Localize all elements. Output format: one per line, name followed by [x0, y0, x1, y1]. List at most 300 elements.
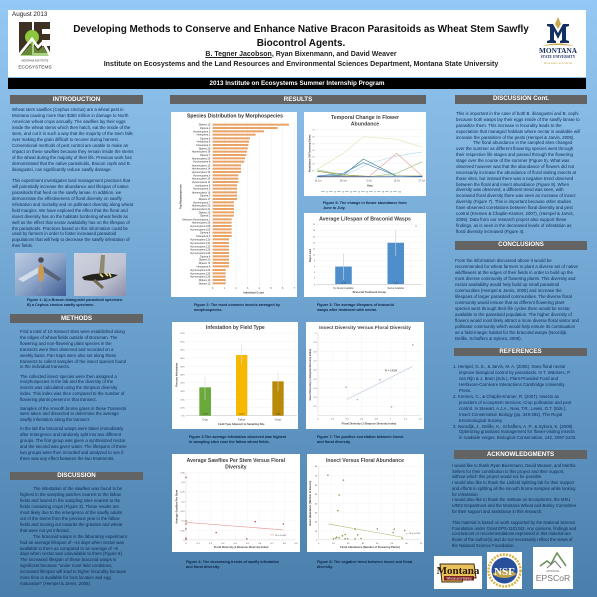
text: methods one: weekly basis. Pan traps were also set along these — [20, 353, 116, 358]
bar chart: infestation by field type: 35% — [180, 366, 185, 368]
text: methods two: flowering plants present in that transect. — [20, 397, 97, 402]
scatter chart: insect versus floral abundance: 80 — [315, 466, 318, 468]
bar chart: species distribution: Unknown Hymenoptera 1 — [182, 218, 211, 221]
text: references: Herbivore-Carnivore Interactions Cambridge University — [459, 382, 564, 387]
bar chart: species distribution: Hymenoptera 14 — [192, 168, 211, 171]
heading: conclusions — [455, 241, 587, 250]
bar chart: infestation by field type: Infestation by Field Type — [206, 325, 265, 331]
line chart: temporal change in flower abundance: T4 — [350, 192, 353, 194]
text: conclusions: communities (Hempel & Jarvis, 2005) and increase the — [455, 288, 562, 293]
bar chart: species distribution: Hymenoptera 21 — [192, 208, 211, 211]
caption: figure 8: diversity. — [317, 564, 333, 568]
scatter chart: average sawflies per stem versus floral diversity: 0 — [183, 540, 185, 542]
caption: figure 3: wasps after treatment with nectar. — [317, 308, 377, 312]
scatter chart: average sawflies per stem versus floral diversity: 0.9 — [295, 543, 298, 545]
text: discussion: available to them as compared to an average of ~5 — [20, 546, 118, 551]
header panel — [8, 10, 586, 77]
text: introduction: inside the wheat stems which then hatch, eat the inside of the — [12, 125, 130, 130]
caption: figure 2: morphospecies. — [194, 308, 223, 312]
text: acknowledgments: I would also like to thank the Linfield Splitting lab for their support — [452, 480, 574, 485]
bar chart: infestation by field type: Crop — [202, 419, 208, 422]
caption: figure 8: Figure 8: The negative trend between insect and floral — [317, 560, 412, 564]
text: discussion continued: have observed correlations between floral diversity and pest — [456, 205, 573, 210]
scatter chart: insect versus floral abundance: 0 — [316, 540, 318, 542]
scatter chart: insect diversity versus floral diversity: 0.6 — [314, 370, 317, 372]
bar chart: species distribution: 7 — [294, 288, 296, 290]
text: discussion: increased lifespan will lead to higher fecundity because — [20, 569, 126, 574]
line chart: temporal change in flower abundance: 10 — [312, 170, 315, 172]
icon: Montana wheat and barley logo — [434, 556, 482, 589]
text: introduction paragraph two: will potentially increase the abundance and lifespan of native — [12, 184, 129, 189]
text: discussion continued: their respective life stages and passed through the flowering — [456, 152, 573, 157]
heading: discussion — [10, 472, 143, 480]
bar chart: infestation by field type: 5% — [182, 416, 185, 418]
text: discussion continued: diversity was observed, a different trend was seen, with — [456, 187, 564, 192]
text: conclusions: community would ensure that as different flowering plant — [455, 300, 564, 305]
heading: references: REFERENCES — [499, 348, 542, 355]
text: discussion: significant because "under most field conditions, — [20, 563, 113, 568]
text: introduction: ibiangustei, can significantly reduce sawfly damage. — [12, 167, 112, 172]
title — [73, 24, 529, 49]
text: introduction — [12, 107, 134, 172]
text: funding statement: This material is based on work supported by the National Science — [452, 520, 575, 525]
text: discussion continued: increase the parasitism of the pests (Hempel & Jarvis, 2005). — [456, 134, 575, 140]
text: funding statement — [452, 520, 576, 548]
scatter chart: average sawflies per stem versus floral diversity: 0.5 — [246, 543, 250, 545]
scatter chart: insect diversity versus floral diversity: 0.4 — [346, 419, 349, 421]
text: introduction: American wheat crops annually. The sawflies lay their eggs — [12, 119, 126, 124]
scatter chart: average sawflies per stem versus floral diversity: 0.7 — [271, 543, 274, 545]
caption: figure 3 infestation — [189, 434, 286, 444]
bar chart: infestation by field type: Fallow — [238, 419, 245, 422]
scatter chart: average sawflies per stem versus floral diversity: 0.2 — [182, 501, 185, 503]
text: discussion: fields and lowest in the sampling sites nearest to the — [20, 498, 120, 503]
bar chart: species distribution: Diptera 74 — [199, 262, 211, 265]
bar chart: infestation by field type: n=115 — [239, 413, 245, 415]
line chart: temporal change in flower abundance: Temporal Change in Flower — [331, 115, 399, 121]
line chart: temporal change in flower abundance: Date — [367, 183, 373, 187]
bar chart: species distribution: Diptera 4 — [200, 255, 211, 258]
line chart: temporal change in flower abundance: 28-Jun — [340, 181, 348, 183]
text: references: providers of ecosystem services: Crop pollination and pest — [459, 400, 571, 405]
bar chart: species distribution: Hymenoptera 126 — [190, 276, 211, 279]
icon: Montana State University logo: STATE UNIVERSITY — [541, 55, 576, 59]
caption: figure 1: B) a Cephus cinctus sawfly specimen. — [27, 302, 94, 306]
line chart: temporal change in flower abundance: T2 — [334, 192, 337, 194]
bar chart: species distribution: Diptera 12 — [199, 282, 211, 285]
text: discussion continued: necessarily increase the abundance of floral visiting insects at — [456, 170, 576, 175]
bar chart: species distribution: Hymenoptera 16 — [192, 191, 211, 194]
bar chart: species distribution: Hymenoptera 132 — [190, 245, 211, 248]
bar chart: infestation by field type: 55% — [180, 333, 185, 335]
line chart: temporal change in flower abundance: Abundance — [351, 121, 379, 127]
bar chart: average lifespan of braconid wasps: n=22 — [394, 282, 398, 284]
bar chart: species distribution: Hymenoptera 128 — [190, 249, 211, 252]
icon: Montana State University logo: MONTANA — [539, 46, 578, 55]
bar chart: average lifespan of braconid wasps: Nectar Available — [387, 287, 405, 290]
bar chart: species distribution: 0 — [212, 288, 214, 290]
text: references — [453, 364, 576, 440]
caption: figure 3 infestation: in sampling sites near the fallow wheat fields. — [189, 440, 270, 444]
bar chart: species distribution: Hymenoptera 33 — [192, 171, 211, 174]
bar chart: average lifespan of braconid wasps: 16 — [313, 236, 316, 238]
bar chart: species distribution: Hymenoptera 108 — [190, 225, 211, 228]
text: references: 3. Noordijk, J., Delille, K., Schaffers, A. P., & Sykora, K. (2009). — [453, 424, 574, 429]
text: conclusions: nectar availability would help build up small parasitoid — [455, 282, 559, 287]
line chart: temporal change in flower abundance: 15-Jun — [314, 181, 322, 183]
scatter chart: insect versus floral abundance: 50 — [315, 494, 318, 496]
bar chart: average lifespan of braconid wasps: 20 — [313, 224, 316, 226]
icon: EPSCoR logo: EPSCoR — [536, 573, 570, 583]
bar chart: species distribution: 4 — [259, 288, 261, 290]
text: methods two: insects was calculated using the Simpson diversity — [20, 385, 117, 390]
scatter chart: insect versus floral abundance: 40 — [315, 503, 318, 505]
bar chart: infestation by field type: 45% — [180, 350, 185, 352]
bar chart: species distribution: Diptera 26 — [199, 147, 211, 150]
caption: figure 2 — [194, 302, 280, 312]
bar chart: species distribution: Hemiptera 8 — [197, 265, 211, 268]
text: conclusions: available to the parasitoid population. The higher diversity of — [455, 312, 572, 317]
scatter chart: insect versus floral abundance: 70 — [420, 543, 423, 545]
scatter chart: average sawflies per stem versus floral diversity: 0.3 — [182, 482, 185, 484]
scatter chart: insect diversity versus floral diversity: Floral Diversity (1-Simpson Diversity Index) — [342, 422, 396, 426]
bar chart: species distribution: Hymenoptera 2 — [193, 130, 211, 133]
line chart: temporal change in flower abundance: T3 — [342, 192, 345, 194]
program banner — [8, 78, 586, 89]
text: methods one: flowering and non-flowering plant species in the — [20, 341, 112, 346]
text: methods three: were taken and dissected to determine the average — [20, 411, 119, 416]
text: methods one: transects to collect samples of the insect species found — [20, 359, 126, 364]
caption: figure 3 infestation: Figure 3:The average infestation observed was highest — [189, 434, 286, 438]
bar chart: species distribution: Hymenoptera 129 — [190, 252, 211, 255]
line chart: temporal change in flower abundance: 50 — [312, 143, 315, 145]
text: introduction paragraph two: parasitoids that feed on the sawfly larvae. In addition, we — [12, 190, 121, 195]
bar chart: infestation by field type: n=81 — [276, 413, 281, 415]
scatter chart: average sawflies per stem versus floral diversity: 0.1 — [182, 521, 185, 523]
text: funding statement: Foundation under Grant EPS-1101342. Any opinions, findings and — [452, 526, 576, 531]
text: introduction: over making the grain difficult to recover during harvest. — [12, 137, 119, 142]
bar chart: species distribution: Diptera 23 — [199, 259, 211, 262]
text: introduction: Montana causing more than $350 million in damage to North — [12, 113, 128, 118]
line chart: temporal change in flower abundance: 40 — [312, 150, 315, 152]
bar chart: infestation by field type: 40% — [180, 358, 185, 360]
text: discussion: maturation" (Hempel & Jarvis, 2005). — [20, 581, 91, 586]
bar chart: species distribution: Hemiptera 1 — [197, 134, 211, 137]
bar chart: species distribution: Hymenoptera 13 — [192, 164, 211, 167]
caption: figure 7: and floral diversity. — [317, 440, 351, 444]
heading: introduction: INTRODUCTION — [53, 96, 100, 103]
scatter chart: insect versus floral abundance — [307, 454, 424, 552]
text: discussion: The increased lifespan of these braconid wasps is — [20, 557, 116, 562]
scatter chart: insect diversity versus floral diversity: 1.2 — [404, 419, 408, 421]
text: acknowledgments — [452, 463, 576, 514]
bar chart: infestation by field type: 20% — [180, 391, 185, 393]
text: methods two: morphospecies in the lab and the diversity of the — [20, 379, 113, 384]
caption: figure 3 — [317, 302, 394, 312]
bar chart: species distribution: 5 — [270, 288, 272, 290]
authors: B. Tegner Jacobson, Ryan Bixenmann, and David Weaver — [205, 51, 397, 58]
text: introduction: stem, and cut it in such a way that the majority of the stem falls — [12, 131, 133, 136]
text: discussion continued: those sites, but instead there was a negative trend observed — [456, 176, 573, 181]
program banner: 2013 Institute on Ecosystems Summer Internship Program — [210, 80, 384, 87]
scatter chart: insect versus floral abundance: 30 — [315, 513, 318, 515]
line chart: temporal change in flower abundance — [304, 112, 426, 196]
text: introduction: of the wheat during the majority of their life. Previous work has — [12, 155, 132, 160]
text: conclusions: recommended for wheat farmers to plant a diverse set of native — [455, 264, 578, 269]
line chart: temporal change in flower abundance: 30 — [312, 157, 315, 159]
bar chart: species distribution: Diptera 17 — [199, 198, 211, 201]
text: discussion continued: stage over the course of the summer (Figure 5). What was — [456, 158, 569, 163]
scatter chart: insect diversity versus floral diversity — [306, 322, 424, 429]
icon: EPSCoR logo — [533, 547, 573, 589]
bar chart: species distribution: Lepidoptera 5 — [195, 184, 211, 187]
text: funding statement: conclusions or recommendations expressed in this material are — [452, 531, 571, 536]
text: introduction: Wheat stem sawflies (Cephus cinctus) are a wheat pest in — [12, 107, 124, 112]
bar chart: species distribution: 6 — [282, 288, 284, 290]
bar chart: average lifespan of braconid wasps: Days Lived — [309, 249, 312, 262]
bar chart: species distribution: Hymenoptera 29 — [192, 157, 211, 160]
photo: Bracon specimen — [15, 253, 66, 296]
bar chart: infestation by field type: 30% — [180, 375, 185, 377]
bar chart: species distribution: Coleoptera 6 — [196, 235, 211, 238]
caption: figure 1: Figure 1: A) a Bracon ibiangustei parasitoid specimen. — [27, 298, 123, 302]
line chart: temporal change in flower abundance: 5-Jul — [366, 181, 372, 183]
text: methods four: there was any effect between the two treatments. — [20, 456, 115, 461]
heading: methods — [10, 314, 143, 323]
bar chart: species distribution: Hymenoptera 24 — [192, 178, 211, 181]
scatter chart: insect versus floral abundance: 10 — [332, 543, 336, 545]
bar chart: species distribution: Hymenoptera 5 — [193, 188, 211, 191]
bar chart: average lifespan of braconid wasps: 0 — [314, 284, 316, 286]
caption: figure 7: Figure 7: The positive correlation between insect — [317, 434, 403, 438]
bar chart: species distribution: 1 — [224, 288, 226, 290]
text: discussion: highest in the sampling patches nearest to the fallow — [20, 492, 121, 497]
bar chart: species distribution: Hymenoptera 120 — [190, 269, 211, 272]
text: discussion: out of the stems from the previous year in the fallow — [20, 516, 119, 521]
date label: August 2013 — [12, 11, 47, 18]
line chart: temporal change in flower abundance: 20 — [312, 164, 315, 166]
scatter chart: average sawflies per stem versus floral diversity — [172, 454, 300, 552]
text: introduction paragraph two: insect diversity has on the habitats bordering wheat fields as — [12, 214, 128, 219]
text: methods four: groups. The first group was given a synthesized nectar — [20, 438, 125, 443]
scatter chart: average sawflies per stem versus floral diversity: 0.4 — [234, 543, 237, 545]
line chart: temporal change in flower abundance: 60 — [312, 136, 315, 138]
text: methods two — [20, 374, 124, 402]
text: methods one: Find a total of 10 transect sites were established along — [20, 329, 125, 334]
bar chart: infestation by field type: 10% — [180, 408, 185, 410]
text: methods three — [20, 406, 126, 422]
text: methods one: transects were then observed and recorded on a — [20, 347, 113, 352]
caption: figure 4: Figure 4: The decreasing trends of sawfly infestation — [186, 560, 279, 564]
text: discussion continued: over the summer as different flowering species went through — [456, 146, 573, 151]
bar chart: infestation by field type: 25% — [180, 383, 185, 385]
line chart: temporal change in flower abundance: T10 — [398, 192, 402, 194]
text: conclusions: Delille, Schaffers & Sykora, 2009). — [455, 336, 522, 341]
text: discussion: The infestation of the sawflies was found to be — [33, 486, 122, 491]
scatter chart: insect diversity versus floral diversity: 0.9 — [314, 342, 317, 344]
text: acknowledgments: and efforts in splitting all the smooth brome samples while looking — [452, 486, 575, 491]
text: acknowledgments: I would like to thank Ryan Bixenmann, David Weaver, and Martha — [452, 463, 575, 468]
icon: Montana wheat and barley logo: Montana — [437, 565, 480, 577]
scatter chart: average sawflies per stem versus floral diversity: 0.2 — [209, 543, 213, 545]
text: references: in roadside verges. Biological Conservation, 142, 2097-2103. — [459, 435, 576, 440]
bar chart: average lifespan of braconid wasps: n — [415, 224, 417, 228]
text: discussion: days when nectar was unavailable to them (Figure 6). — [20, 551, 123, 556]
scatter chart: average sawflies per stem versus floral diversity: 0.35 — [180, 472, 185, 474]
bar chart: species distribution: Hemiptera 6 — [197, 141, 211, 144]
text: references: Optimizing grassland management for flower-visiting insects — [459, 429, 575, 434]
bar chart: species distribution: Diptera 6 — [200, 137, 211, 140]
bar chart: species distribution: Hymenoptera 26 — [192, 222, 211, 225]
text: conclusions: as a field-margin habitat for the braconid wasps (Noordijk, — [455, 330, 567, 335]
text: conclusions: most diverse community of flowering plants. This diversity and — [455, 276, 575, 281]
affiliation: Institute on Ecosystems and the Land Resources and Environmental Sciences Department, Montana State University — [104, 60, 498, 68]
scatter chart: insect versus floral abundance: 60 — [405, 543, 408, 545]
scatter chart: insect diversity versus floral diversity: 1.4 — [419, 419, 422, 421]
text: references: Insect Conservation Biology (pp. 349-382). The Royal — [459, 412, 562, 417]
text: acknowledgments: I would also like to thank the Institute on Ecosystems, the MSU — [452, 497, 570, 502]
bar chart: average lifespan of braconid wasps: 4 — [314, 272, 316, 274]
text: acknowledgments: for infestation. — [452, 492, 479, 497]
text: introduction: Conventional methods of pest control are unable to make an — [12, 143, 128, 148]
bar chart: average lifespan of braconid wasps: No Nectar Available — [333, 287, 354, 290]
text: references: control. In Stewart, A.J.A., New, T.R., Lewis, O.T. (Eds.), — [459, 406, 567, 411]
text: conclusions: From the information discussed above it would be — [455, 258, 552, 263]
scatter chart: insect diversity versus floral diversity: 0.4 — [314, 388, 317, 390]
bar chart: species distribution: Species Distribution by Morphospecies — [187, 114, 283, 120]
bar chart: species distribution — [171, 112, 297, 297]
icon: Montana wheat and barley logo: Wheat and Barley — [446, 577, 472, 581]
text: acknowledgments: LRES Department and the Montana Wheat and Barley Committee — [452, 503, 576, 508]
scatter chart: average sawflies per stem versus floral diversity: 0.3 — [221, 543, 225, 545]
bar chart: species distribution: Hymenoptera 130 — [190, 238, 211, 241]
bar chart: species distribution: Diptera 8 — [200, 232, 211, 235]
bar chart: infestation by field type — [172, 322, 298, 429]
scatter chart: average sawflies per stem versus floral diversity: Average Sawflies Per Stem Versus Floral — [187, 458, 286, 464]
text: methods three: sawfly infestation along the transect. — [20, 417, 90, 422]
line chart: temporal change in flower abundance: T9 — [390, 192, 393, 194]
bar chart: species distribution: Hymenoptera 9 — [193, 174, 211, 177]
title: Developing Methods to Conserve and Enhance Native Bracon Parasitoids as Wheat Stem Sawfly — [73, 24, 529, 35]
text: discussion continued: control (Kremen & Chaplin-Kramer, 2007), (Hempel & Jarvis, — [456, 211, 574, 216]
text: discussion continued: observed however was that the abundance of flowers did not — [456, 164, 574, 169]
text: introduction paragraph two: This experiment investigates land management practices that — [12, 178, 130, 183]
text: conclusions: lifespans of larger parasitoid communities. The diverse floral — [455, 294, 572, 299]
text: methods four: In the lab the braconid wasps were taken immediately — [20, 426, 123, 431]
caption: figure 1 — [27, 298, 123, 307]
bar chart: average lifespan of braconid wasps: 14 — [313, 242, 316, 244]
heading: results: RESULTS — [284, 96, 312, 103]
scatter chart: insect versus floral abundance: 40 — [376, 543, 379, 545]
text: acknowledgments: without which this project would not be possible. — [452, 474, 542, 479]
photo: Cephus cinctus specimen — [74, 253, 126, 296]
text: discussion continued: findings, as is seen in the decreased levels of infestation as — [456, 223, 571, 228]
scatter chart: insect versus floral abundance: Floral Abundance (Number of Flowering Plants) — [340, 545, 400, 549]
bar chart: infestation by field type: 50% — [180, 341, 185, 343]
text: discussion continued: This is important in the case of both B. ibiangustei and B. cephi — [456, 111, 579, 116]
line chart: temporal change in flower abundance: T7 — [374, 192, 377, 194]
scatter chart: insect versus floral abundance: Insect Abundance (Number of Insects) — [309, 481, 312, 526]
bar chart: infestation by field type: 15% — [180, 399, 185, 401]
bar chart: species distribution: Hymenoptera 105 — [190, 228, 211, 231]
bar chart: species distribution: 2 — [235, 288, 237, 290]
text: discussion: The braconid wasps in the laboratory experiment — [33, 534, 127, 539]
scatter chart: insect versus floral abundance: R² = 0.0505 — [409, 532, 421, 535]
text: discussion: had an average lifespan of ~14 days when nectar was — [20, 540, 124, 545]
scatter chart: insect diversity versus floral diversity: 0.6 — [360, 419, 364, 421]
bar chart: species distribution: Hymenoptera 38 — [192, 151, 211, 154]
bar chart: infestation by field type: Percent Infestation — [174, 362, 178, 387]
text: references: 2. Kremen, C., & Chaplin-Kramer, R. (2007). Insects as — [453, 394, 559, 399]
text: conclusions: flowers would most likely attract a more diverse floral visitor and — [455, 318, 579, 323]
heading: discussion continued — [455, 95, 587, 104]
bar chart: average lifespan of braconid wasps: n=19 — [341, 282, 346, 284]
scatter chart: average sawflies per stem versus floral diversity: 0.05 — [180, 530, 185, 532]
icon: NSF logo — [487, 552, 522, 589]
bar chart: average lifespan of braconid wasps: Braconid Treatment Group — [353, 290, 386, 294]
scatter chart: insect diversity versus floral diversity: Insect Diversity (1-Simpson Diversity Index) — [309, 349, 312, 400]
caption: figure 8 — [317, 560, 412, 569]
bar chart: infestation by field type: Grass — [275, 419, 282, 422]
text: discussion: most likely due to the emergence of the sawfly adults — [20, 510, 122, 515]
icon: Montana State University logo: Mountains and Minds — [544, 61, 573, 65]
bar chart: species distribution: Coleoptera 3 — [196, 144, 211, 147]
text: discussion continued: The floral abundance in the sampled sites changed — [473, 140, 572, 145]
heading: discussion continued: DISCUSSION Cont. — [493, 95, 549, 102]
line chart: temporal change in flower abundance: 70 — [312, 130, 315, 132]
text: acknowledgments: Sellers for their contribution to this project and their support, — [452, 469, 564, 474]
scatter chart: average sawflies per stem versus floral diversity: 0.1 — [197, 543, 201, 545]
scatter chart: insect diversity versus floral diversity: 0.2 — [331, 419, 335, 421]
text: introduction paragraph two: infestation and mortality and on pollinator diversity along wheat — [12, 202, 133, 207]
scatter chart: insect diversity versus floral diversity: 0.2 — [314, 406, 317, 408]
scatter chart: average sawflies per stem versus floral diversity: Diversity — [225, 464, 247, 470]
bar chart: species distribution: Diptera 7 — [200, 154, 211, 157]
bar chart: species distribution: Diptera 15 — [199, 124, 211, 127]
text: references: improve biological control by parasitoids. In T. Wäckers, P. — [459, 370, 571, 375]
icon: NSF logo: NSF — [494, 566, 515, 578]
scatter chart: insect diversity versus floral diversity: 1 — [315, 333, 317, 335]
bar chart: species distribution: Diptera 3 — [200, 195, 211, 198]
heading: discussion: DISCUSSION — [57, 472, 96, 479]
scatter chart: average sawflies per stem versus floral diversity: R² = 0.0149 — [275, 534, 287, 537]
bar chart: species distribution: 3 — [247, 288, 249, 290]
icon: Institute on Ecosystems logo — [18, 22, 52, 70]
bar chart: species distribution: Hymenoptera 20 — [192, 205, 211, 208]
caption: figure 5: June to July. — [323, 206, 345, 210]
bar chart: species distribution: Hymenoptera 7 — [193, 201, 211, 204]
scatter chart: average sawflies per stem versus floral diversity: 0.8 — [283, 543, 287, 545]
text: conclusions: wildflowers at the edges of their fields in order to build up the — [455, 270, 573, 275]
icon: Institute on Ecosystems logo: MONTANA INSTITUTE — [22, 58, 49, 62]
line chart: temporal change in flower abundance: T8 — [382, 192, 385, 194]
heading: references — [454, 348, 587, 356]
scatter chart: insect diversity versus floral diversity: 0.3 — [314, 397, 317, 399]
text: acknowledgments: for their support and assistance in this research. — [452, 509, 542, 514]
text: introduction paragraph two: well as the effect that nectar availability has on the lifespan of — [12, 220, 130, 225]
text: methods one: the edges of wheat fields outside of Bozeman. The — [20, 335, 117, 340]
text: introduction: impact on these sawflies because they remain inside the stems — [12, 149, 133, 154]
icon: EPSCoR logo: MONTANA — [547, 569, 560, 573]
bar chart: infestation by field type: n=68 — [203, 413, 208, 415]
scatter chart: insect diversity versus floral diversity: R² = 0.4289 — [385, 369, 398, 372]
bar chart: species distribution: Diptera 13 — [199, 279, 211, 282]
scatter chart: insect versus floral abundance: 60 — [315, 485, 318, 487]
scatter chart: average sawflies per stem versus floral diversity: 0.15 — [180, 511, 185, 513]
bar chart: average lifespan of braconid wasps: 6 — [314, 266, 316, 268]
text: conclusions: pollinator community which would help ensure its continuation — [455, 324, 575, 329]
heading: conclusions: CONCLUSIONS — [498, 241, 544, 248]
